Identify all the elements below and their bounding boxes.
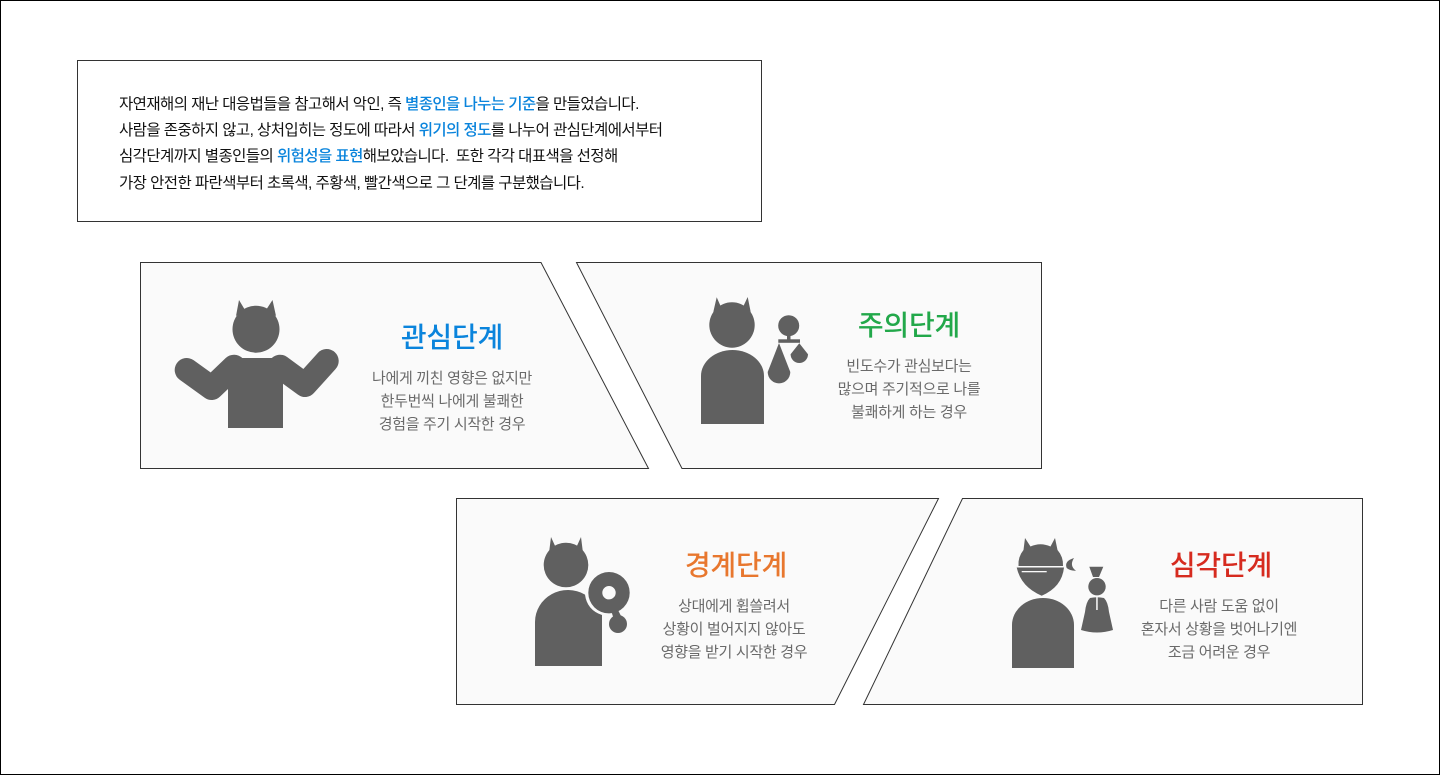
icon: devil with bandana and bag	[1012, 538, 1113, 668]
description: 다른 사람 도움 없이	[1159, 598, 1279, 615]
description: 혼자서 상황을 벗어나기엔	[1141, 621, 1297, 638]
heading: 주의단계	[858, 310, 960, 341]
heading: 관심단계	[401, 322, 503, 353]
icon: shrugging devil	[187, 300, 327, 428]
icon: devil with scales	[701, 297, 808, 424]
icon: devil with magnifier	[535, 537, 630, 666]
panel: 주의단계	[576, 262, 1042, 468]
intro line 2: 사람을 존중하지 않고, 상처입히는 정도에 따라서 위기의 정도를 나누어 관심단계에서부터	[119, 121, 662, 139]
intro line 3: 심각단계까지 별종인들의 위험성을 표현해보았습니다. 또한 각각 대표색을 선정해	[119, 147, 618, 165]
description: 경험을 주기 시작한 경우	[379, 416, 526, 433]
description: 영향을 받기 시작한 경우	[661, 644, 808, 661]
heading: 심각단계	[1170, 550, 1272, 581]
description: 상황이 벌어지지 않아도	[663, 621, 806, 638]
description: 한두번씩 나에게 불쾌한	[381, 393, 524, 410]
panel: 관심단계	[140, 262, 648, 468]
description	[1141, 598, 1297, 661]
intro line 1: 자연재해의 재난 대응법들을 참고해서 악인, 즉 별종인을 나누는 기준을 만들었습니다.	[119, 95, 639, 113]
intro line 4: 가장 안전한 파란색부터 초록색, 주황색, 빨간색으로 그 단계를 구분했습니다.	[119, 174, 584, 192]
description	[661, 598, 808, 661]
description	[838, 358, 981, 421]
panel: 심각단계	[864, 498, 1362, 704]
description: 빈도수가 관심보다는	[846, 358, 972, 375]
description: 조금 어려운 경우	[1168, 644, 1271, 661]
description: 상대에게 휩쓸려서	[678, 598, 790, 615]
description: 불쾌하게 하는 경우	[851, 404, 967, 421]
panel: 경계단계	[456, 498, 938, 704]
description: 많으며 주기적으로 나를	[838, 381, 981, 398]
heading: 경계단계	[685, 550, 787, 581]
description: 나에게 끼친 영향은 없지만	[372, 370, 533, 387]
intro text box	[78, 60, 762, 222]
description	[372, 370, 533, 433]
